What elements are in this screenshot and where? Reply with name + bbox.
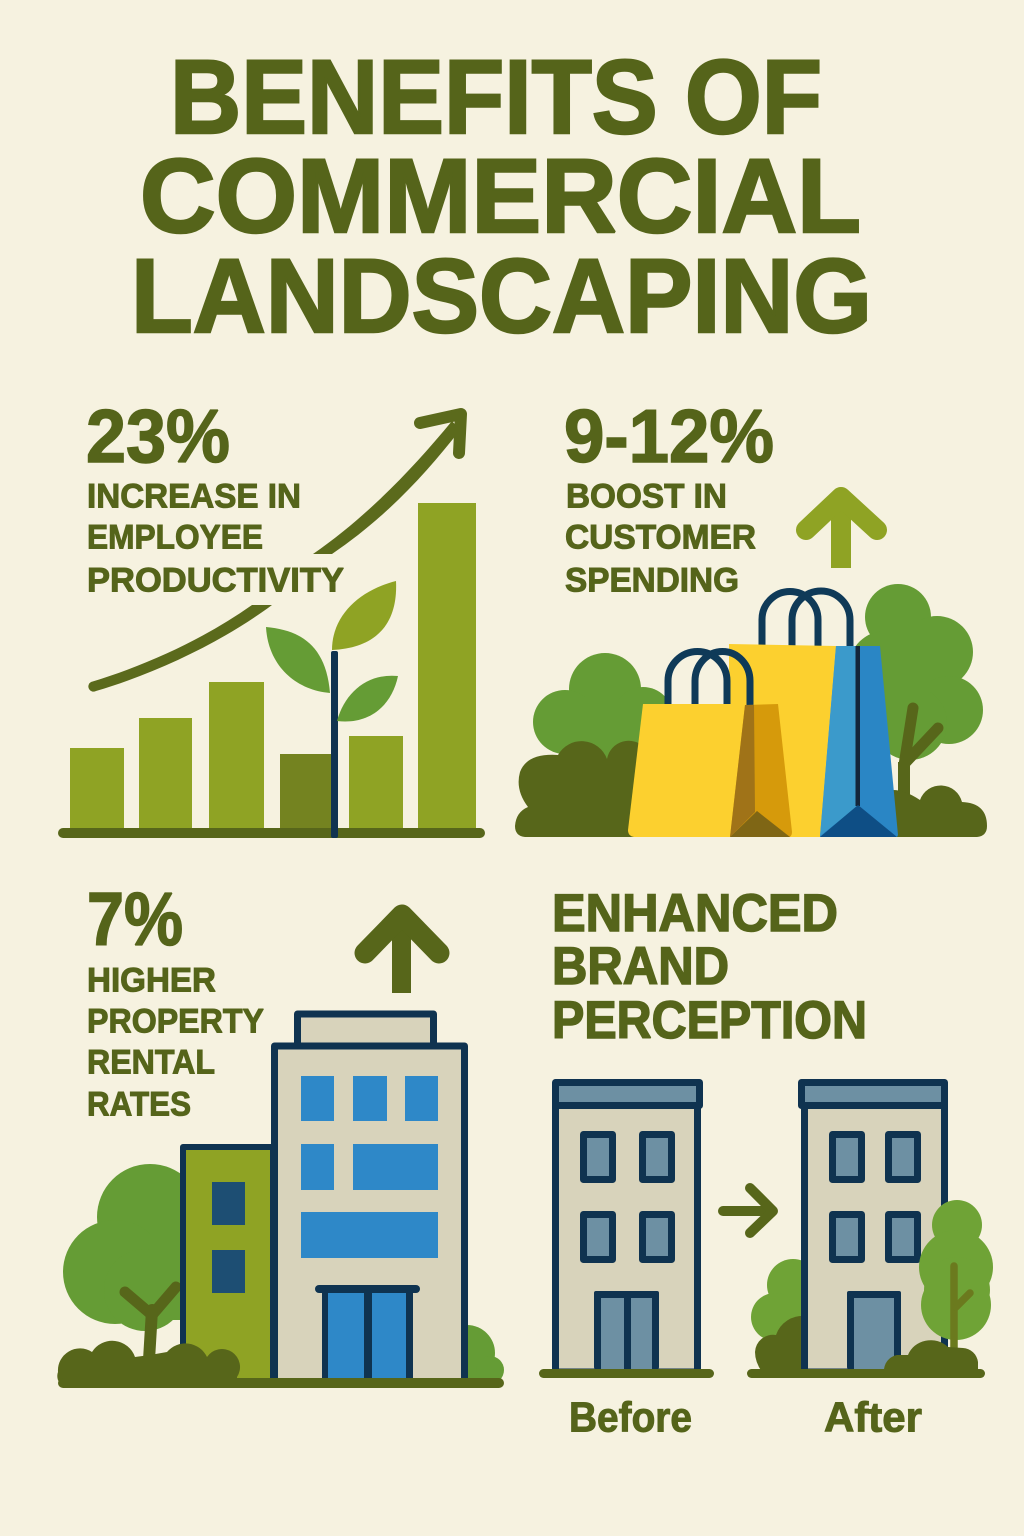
trees and shrubs behind bags bbox=[515, 584, 987, 837]
stat: 23%: 23% bbox=[86, 394, 230, 478]
building: after bbox=[802, 1082, 944, 1372]
heading: enhanced brand perception bbox=[552, 884, 867, 1050]
shrubs left of after building bbox=[751, 1259, 819, 1372]
label: increase in employee productivity: PRODUCTIVITY bbox=[87, 562, 344, 600]
label: increase in employee productivity: INCREASE IN bbox=[87, 478, 301, 516]
panel: enhanced brand perception bbox=[539, 884, 993, 1440]
ground and dark shrubs bbox=[57, 1341, 504, 1388]
label: higher property rental rates: RATES bbox=[87, 1086, 191, 1124]
title: BENEFITS OF bbox=[170, 39, 822, 156]
icon: up arrow bbox=[365, 915, 439, 993]
icon: growth arrow bbox=[88, 414, 461, 692]
heading: enhanced brand perception: PERCEPTION bbox=[552, 991, 867, 1050]
title: COMMERCIAL bbox=[140, 138, 861, 255]
small bag handles bbox=[668, 652, 750, 706]
heading: enhanced brand perception: ENHANCED bbox=[552, 884, 838, 943]
stat: 9-12%: 9-12% bbox=[564, 394, 774, 478]
stat: 7%: 7% bbox=[87, 877, 183, 961]
label: before: Before bbox=[569, 1394, 692, 1440]
arrow: before to after bbox=[723, 1188, 773, 1233]
entrance door bbox=[315, 1285, 420, 1380]
tree and shrubs right of after building bbox=[747, 1200, 993, 1378]
title bbox=[131, 39, 872, 355]
building: main tower bbox=[274, 1014, 464, 1382]
building: before bbox=[539, 1082, 714, 1378]
label: after: After bbox=[824, 1394, 922, 1440]
bar chart bbox=[58, 503, 485, 838]
label: higher property rental rates: PROPERTY bbox=[87, 1002, 264, 1040]
large bag handles bbox=[762, 591, 850, 648]
label: boost in customer spending: CUSTOMER bbox=[565, 518, 756, 556]
heading: enhanced brand perception: BRAND bbox=[552, 937, 729, 996]
label: boost in customer spending bbox=[565, 478, 756, 600]
panel: employee productivity bbox=[58, 394, 485, 838]
panel: customer spending bbox=[515, 394, 987, 837]
tree and right shrub bbox=[63, 1164, 504, 1384]
label: higher property rental rates bbox=[87, 962, 264, 1124]
label: boost in customer spending: SPENDING bbox=[565, 562, 739, 600]
panel: property rental rates bbox=[57, 877, 504, 1388]
icon: sprouting plant bbox=[266, 581, 398, 838]
dark shrubs bbox=[515, 741, 987, 837]
label: increase in employee productivity: EMPLOYEE bbox=[87, 518, 263, 556]
label: higher property rental rates: HIGHER bbox=[87, 962, 216, 1000]
label: boost in customer spending: BOOST IN bbox=[566, 478, 727, 516]
icon: up arrow bbox=[806, 497, 877, 568]
tree trunk bbox=[125, 1287, 176, 1360]
building: low annex bbox=[183, 1147, 273, 1382]
label: higher property rental rates: RENTAL bbox=[87, 1044, 215, 1082]
label: increase in employee productivity bbox=[87, 478, 344, 600]
icon: shopping bags bbox=[628, 591, 898, 837]
title: LANDSCAPING bbox=[131, 238, 872, 355]
